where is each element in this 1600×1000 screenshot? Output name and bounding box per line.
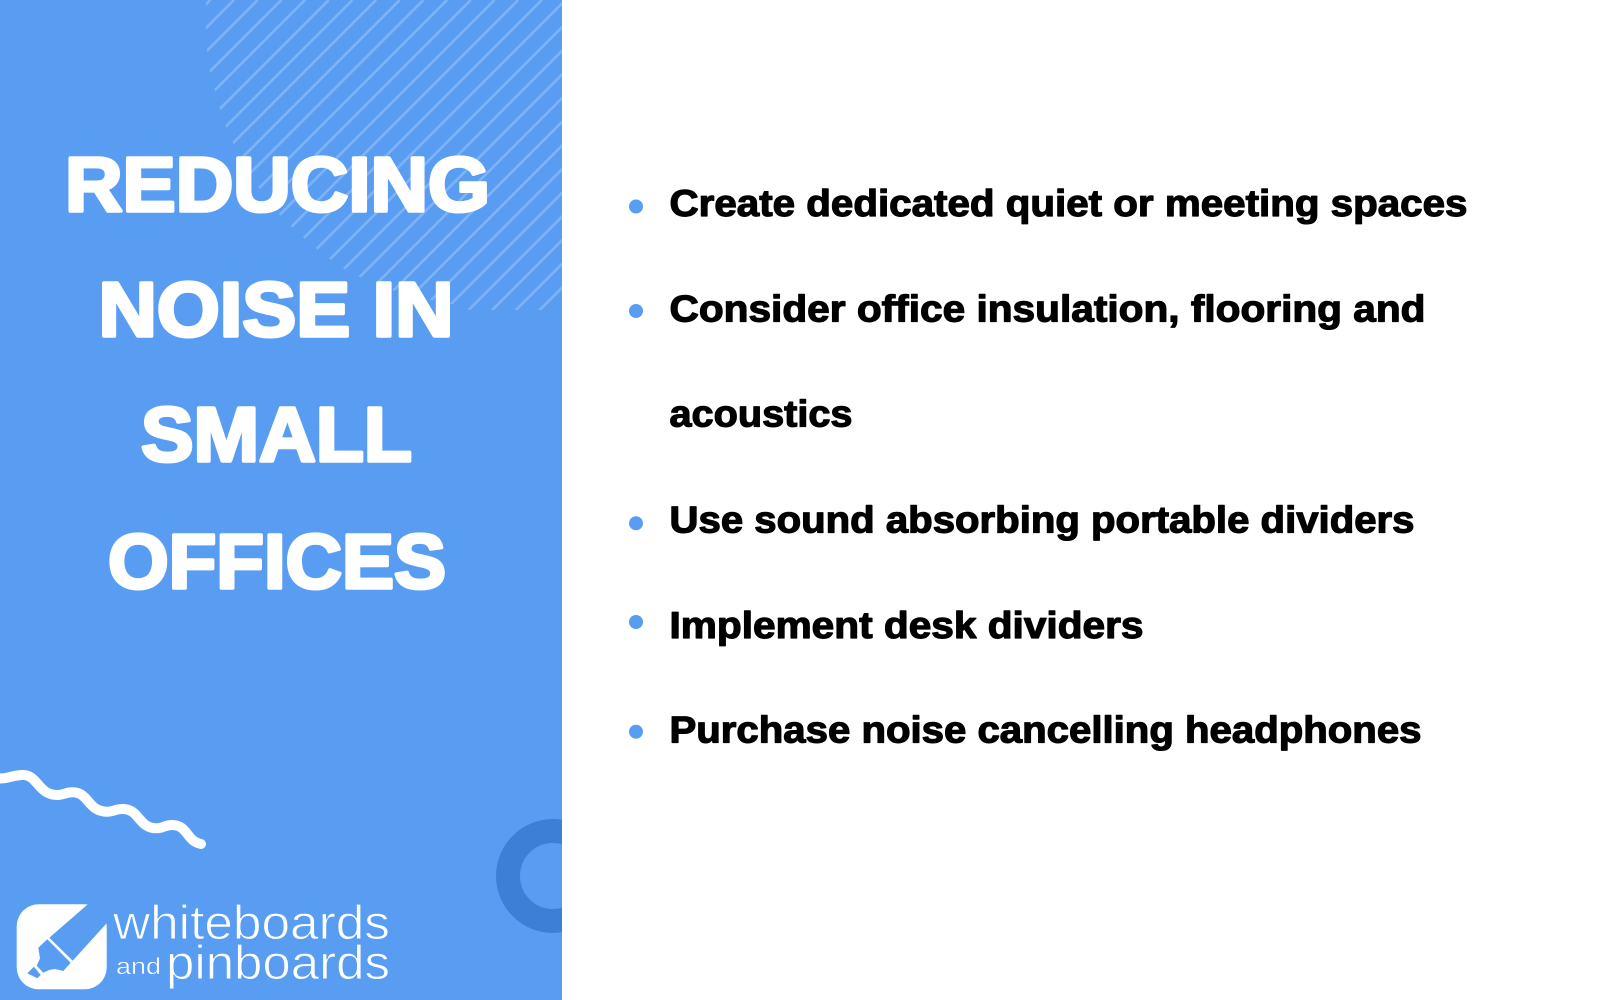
title: [65, 142, 490, 605]
panel: blue left panel: [0, 0, 562, 1000]
item: desk dividers: Implement desk dividers: [670, 604, 1144, 646]
logo: whiteboards and pinboards: [17, 897, 390, 990]
title: OFFICES: [108, 519, 446, 605]
item: headphones: Purchase noise cancelling headphones: [670, 709, 1422, 751]
hatched decorative area: [206, 0, 562, 310]
icon: marker in rounded square: [17, 903, 108, 989]
logo wordmark: whiteboards: [112, 897, 390, 950]
item: portable dividers: Use sound absorbing portable dividers: [670, 499, 1414, 541]
logo wordmark: [112, 897, 390, 990]
decorative ring: [508, 831, 598, 921]
item: insulation: acoustics: [670, 392, 852, 434]
logo wordmark: and: [116, 953, 161, 979]
bullet list: [629, 182, 1468, 751]
title: SMALL: [141, 392, 412, 478]
logo wordmark: pinboards: [166, 937, 390, 990]
item: quiet spaces: Create dedicated quiet or meeting spaces: [670, 182, 1468, 224]
title: NOISE IN: [98, 267, 454, 353]
title: REDUCING: [65, 142, 490, 228]
item: insulation: [629, 288, 1426, 434]
decorative squiggle: [0, 775, 201, 844]
item: insulation: Consider office insulation, flooring and: [670, 288, 1426, 330]
